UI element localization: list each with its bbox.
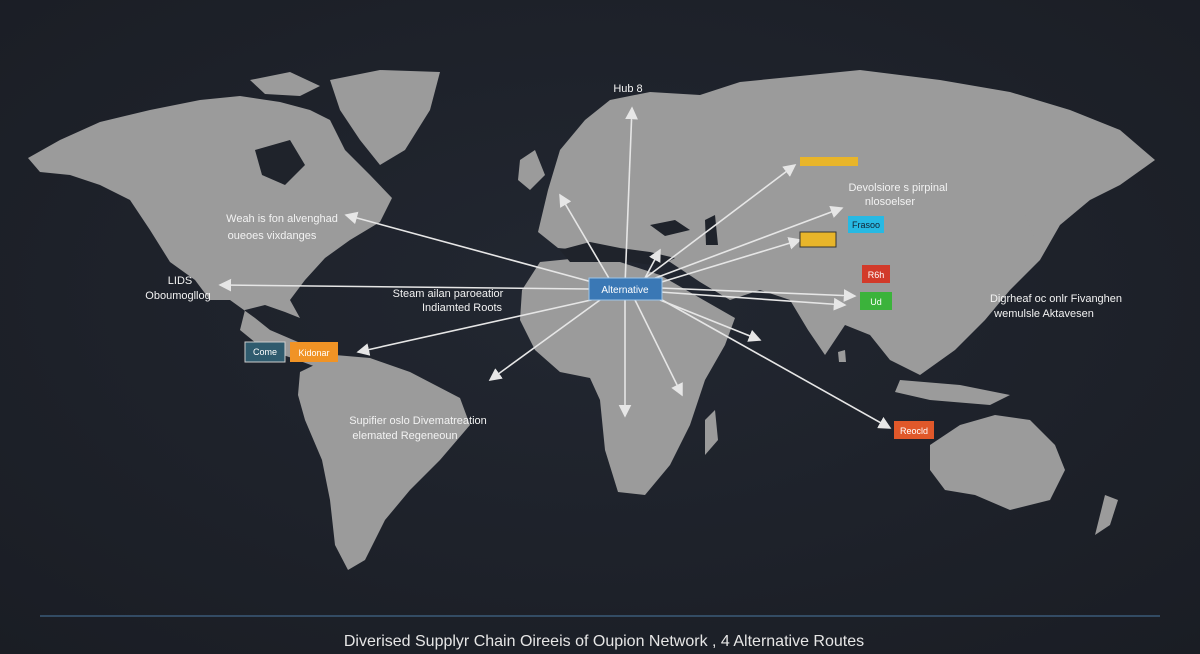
labels: nlosoelser (865, 196, 915, 208)
labels: oueoes vixdanges (228, 230, 317, 242)
node boxes: R6h (868, 270, 884, 280)
labels: Supifier oslo Divematreation (349, 415, 487, 427)
labels: Devolsiore s pirpinal (848, 182, 948, 194)
node boxes: Kidonar (298, 348, 330, 358)
new zealand (1095, 495, 1118, 535)
arctic islands (250, 72, 320, 96)
labels: Weah is fon alvenghad (226, 213, 338, 225)
sri lanka (838, 350, 846, 362)
center hub box (589, 278, 662, 300)
caption: Diverised Supplyr Chain Oireeis of Oupion Network , 4 Alternative Routes (344, 633, 864, 650)
japan (1005, 215, 1035, 270)
arrows (220, 108, 890, 428)
node boxes: Frasoo (852, 220, 880, 230)
labels: LIDS (168, 275, 192, 287)
north america (28, 96, 392, 372)
labels: Indiamted Roots (422, 302, 503, 314)
node boxes (245, 157, 934, 439)
labels: elemated Regeneoun (352, 430, 458, 442)
africa (520, 258, 735, 495)
greenland (330, 70, 440, 165)
water cutouts (255, 140, 305, 185)
labels: Steam ailan paroeatior (393, 288, 504, 300)
node boxes: Come (253, 347, 277, 357)
australia (930, 415, 1065, 510)
node boxes: Reocld (900, 426, 928, 436)
world map (28, 70, 1155, 570)
center hub box: Alternative (601, 285, 649, 296)
bottom rule (40, 615, 1160, 617)
node boxes: Ud (870, 297, 882, 307)
south america (298, 355, 470, 570)
europe asia (538, 70, 1155, 375)
labels: Digrheaf oc onlr Fivanghen (990, 293, 1122, 305)
uk (518, 150, 545, 190)
madagascar (705, 410, 718, 455)
labels: wemulsle Aktavesen (993, 308, 1094, 320)
labels (145, 83, 1122, 442)
labels: Hub 8 (613, 83, 643, 95)
se asia islands (895, 380, 1010, 405)
labels: Oboumogllog (145, 290, 211, 302)
